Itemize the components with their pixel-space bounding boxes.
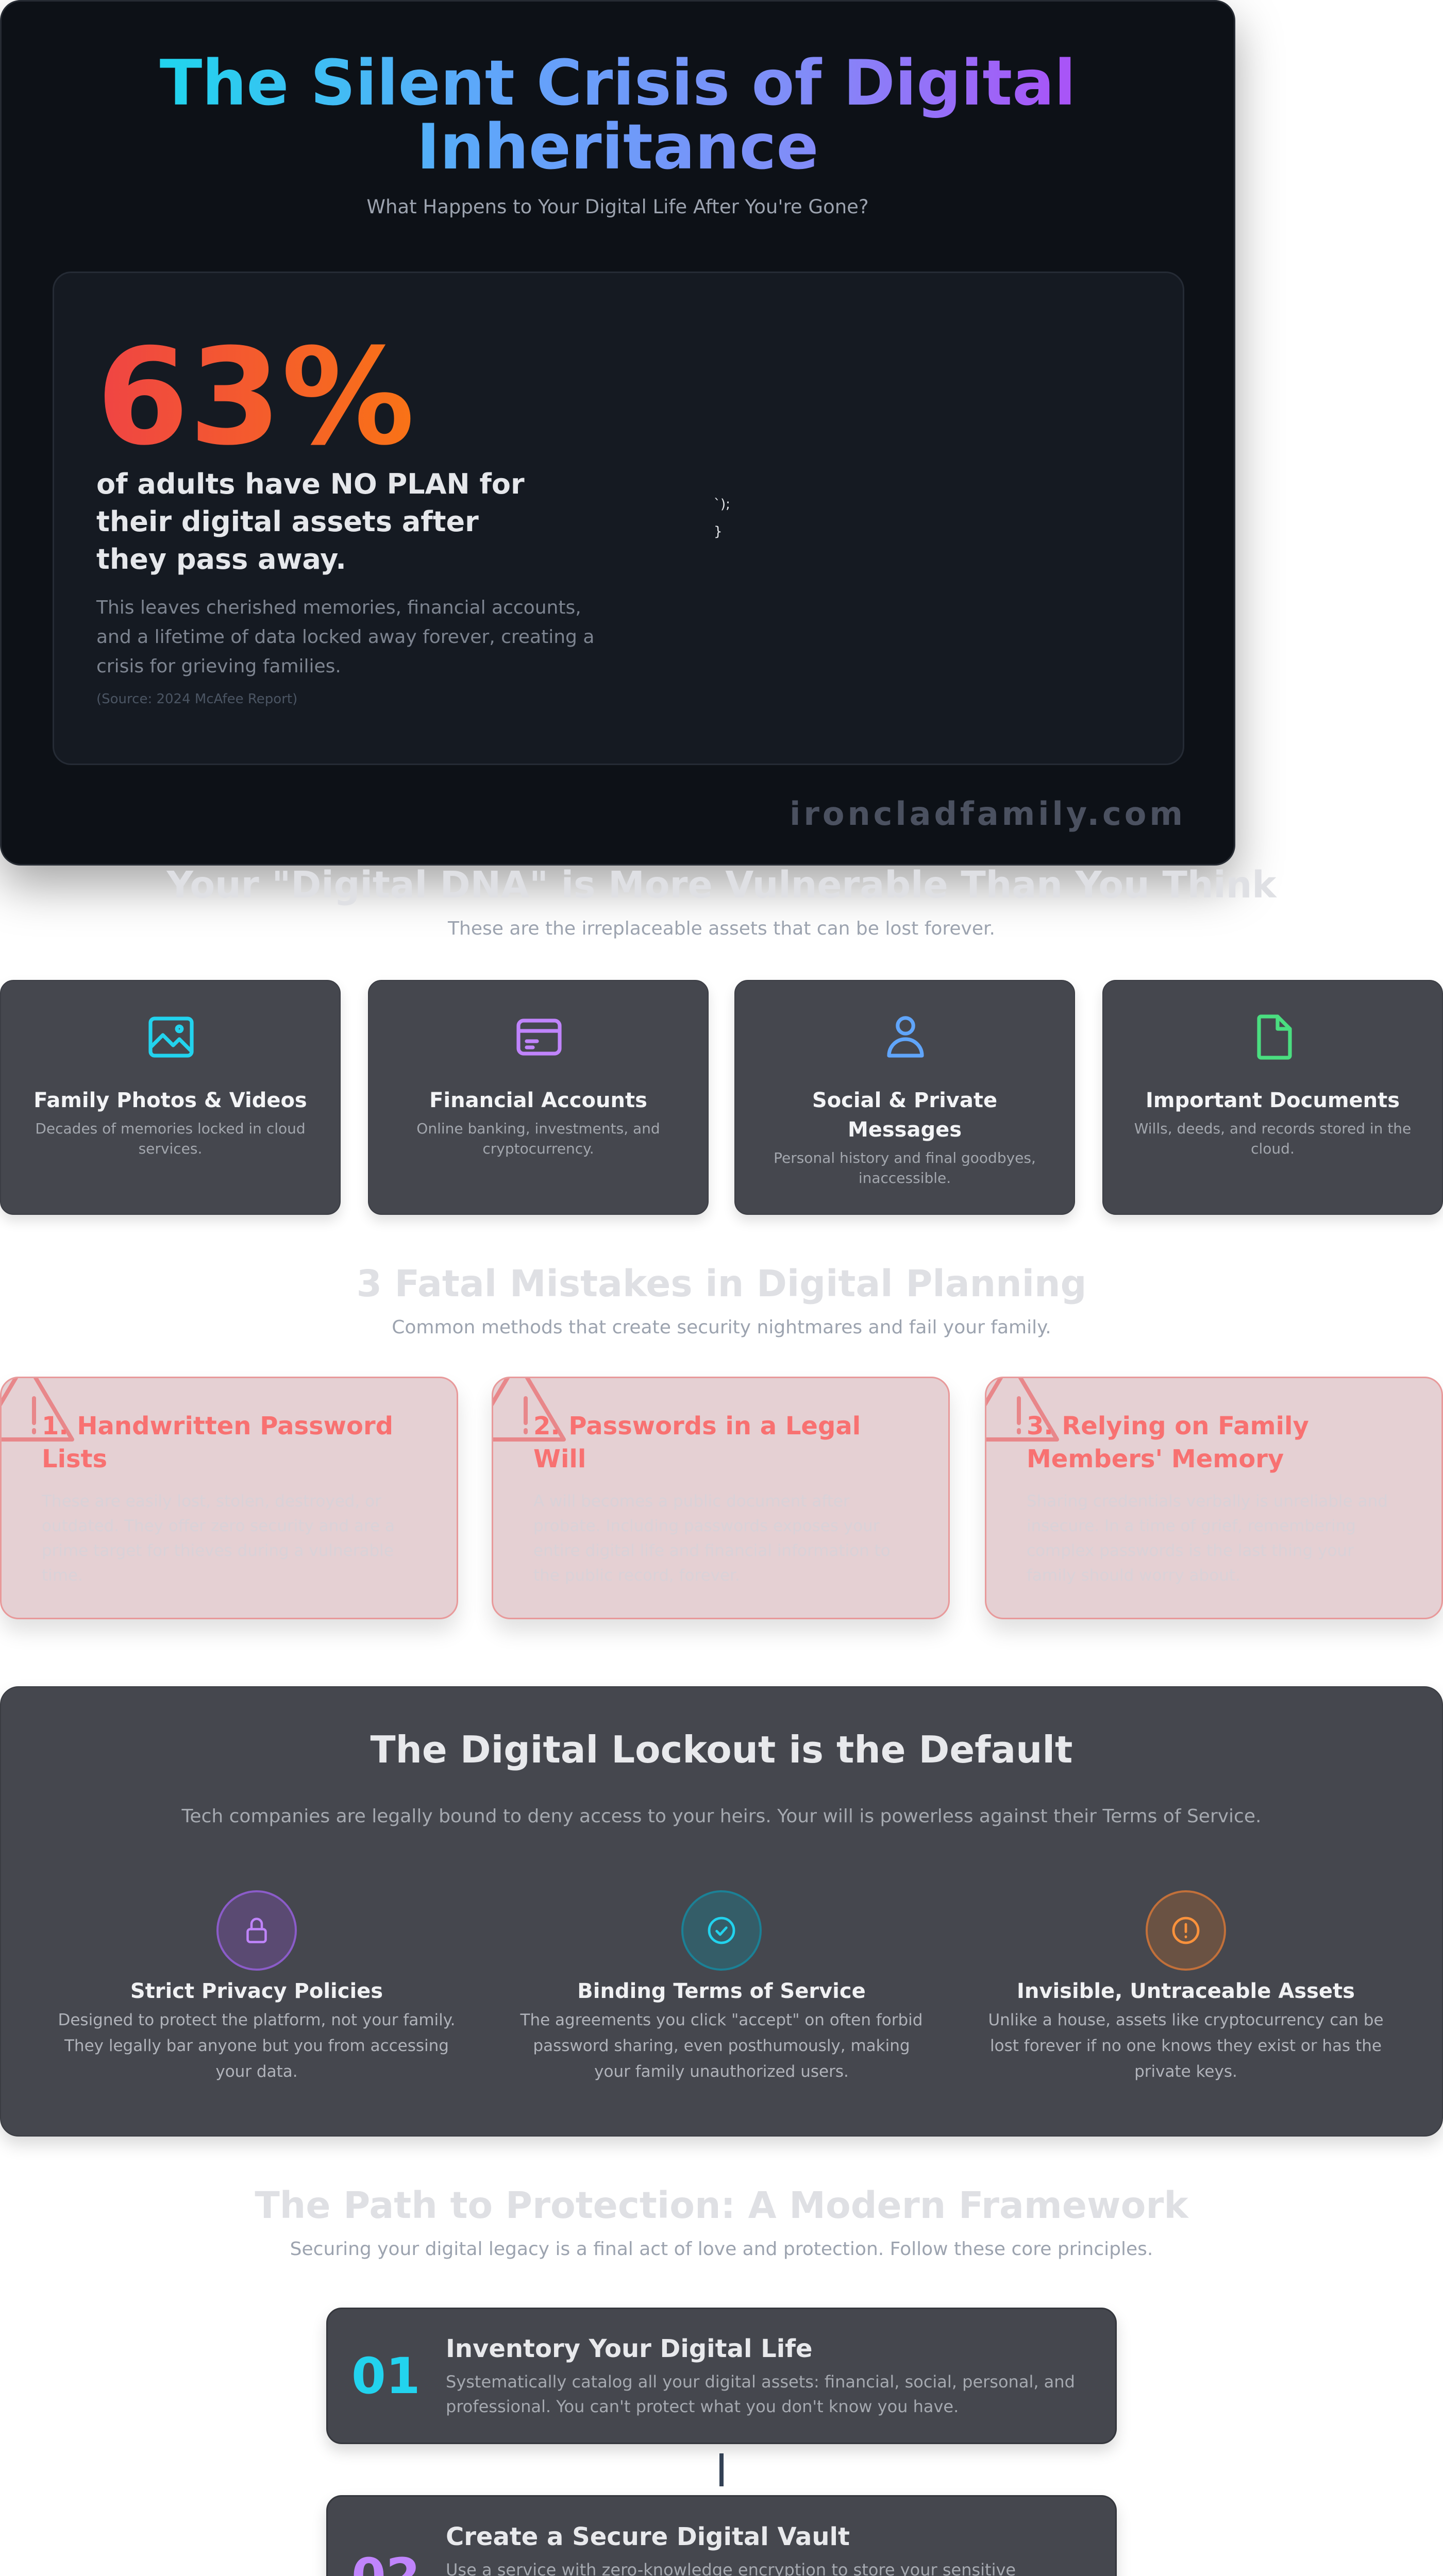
icon: check xyxy=(681,1890,762,1971)
card: mistake 3: insecure. In a time of grief, remembering xyxy=(1027,1517,1356,1535)
card: financial: Financial Accounts xyxy=(429,1089,647,1112)
heading: mistakes: 3 Fatal Mistakes in Digital Planning xyxy=(357,1262,1086,1305)
source: (Source: 2024 McAfee Report) xyxy=(96,691,297,707)
icon: document xyxy=(1257,1014,1292,1060)
stray code text: } xyxy=(714,524,723,539)
card: mistake 1: Lists xyxy=(42,1445,107,1473)
card: mistake 3: Members' Memory xyxy=(1027,1445,1284,1473)
card: mistake 3: family should worry about. xyxy=(1027,1566,1240,1585)
column: terms of service xyxy=(520,1890,922,2081)
column: privacy policies: They legally bar anyone but you from accessing xyxy=(64,2037,449,2055)
card: mistake 3: Sharing credentials verbally is unreliable and xyxy=(1027,1492,1388,1511)
card: mistake 1: These are easily lost, stolen, destroyed, or xyxy=(42,1492,381,1511)
column: invisible assets: private keys. xyxy=(1134,2062,1237,2081)
domain: ironcladfamily.com xyxy=(790,795,1186,833)
card: mistake 1: outdated. They offer zero security and are a xyxy=(42,1517,395,1535)
card: family photos: services. xyxy=(139,1140,202,1157)
lockout subtitle: Tech companies are legally bound to deny access to your heirs. Your will is powerless against their Terms of Service. xyxy=(182,1806,1261,1827)
card: social: Personal history and final goodbyes, xyxy=(774,1149,1036,1166)
card: financial: cryptocurrency. xyxy=(482,1140,594,1157)
panel: digital lockout xyxy=(0,1686,1443,2137)
icon: user xyxy=(887,1016,924,1058)
card: family photos xyxy=(0,980,341,1215)
heading: digital DNA: Your "Digital DNA" is More Vulnerable Than You Think xyxy=(166,863,1277,906)
column: terms of service: password sharing, even posthumously, making xyxy=(533,2037,910,2055)
card: documents: cloud. xyxy=(1251,1140,1295,1157)
stray code text xyxy=(714,497,730,539)
card: mistake 2: probate. Including passwords exposes your xyxy=(533,1517,880,1535)
step 01: Inventory Your Digital Life xyxy=(446,2334,813,2363)
subheading: mistakes: Common methods that create security nightmares and fail your family. xyxy=(392,1317,1051,1338)
icon: image xyxy=(148,1016,194,1058)
card: mistake 1: 1. Handwritten Password xyxy=(42,1412,393,1440)
title xyxy=(2,52,1234,179)
stat description: This leaves cherished memories, financial accounts, xyxy=(96,597,581,618)
card: social: Messages xyxy=(848,1118,962,1142)
heading: path to protection: The Path to Protection: A Modern Framework xyxy=(255,2184,1188,2227)
icon: warning xyxy=(493,1378,566,1442)
card: documents xyxy=(1102,980,1443,1215)
stat statement: of adults have NO PLAN for xyxy=(96,468,525,500)
stat statement xyxy=(96,468,525,575)
big stat 63%: 63% xyxy=(96,320,415,474)
card: financial: Online banking, investments, and xyxy=(416,1120,660,1137)
card: documents: Important Documents xyxy=(1146,1089,1400,1112)
icon: lock xyxy=(216,1890,297,1971)
lockout heading: The Digital Lockout is the Default xyxy=(371,1728,1072,1771)
card: mistake 3: 3. Relying on Family xyxy=(1027,1412,1309,1440)
stray code text: `); xyxy=(714,497,730,512)
column: privacy policies: your data. xyxy=(215,2062,298,2081)
column: privacy policies xyxy=(58,1890,456,2081)
column: terms of service: Binding Terms of Service xyxy=(577,1979,866,2003)
stat description: and a lifetime of data locked away forever, creating a xyxy=(96,626,594,648)
card: family photos: Family Photos & Videos xyxy=(33,1089,307,1112)
stat statement: their digital assets after xyxy=(96,505,479,538)
stat statement: they pass away. xyxy=(96,543,346,575)
card: mistake 3 xyxy=(985,1377,1443,1619)
card: mistake 2: Will xyxy=(533,1445,586,1473)
stat description xyxy=(96,597,594,677)
column: terms of service: The agreements you click "accept" on often forbid xyxy=(521,2011,922,2029)
step 01: Systematically catalog all your digital assets: financial, social, personal, and xyxy=(446,2372,1075,2392)
card: mistake 1: time. xyxy=(42,1566,83,1585)
hero panel xyxy=(0,0,1235,866)
card: mistake 2: 2. Passwords in a Legal xyxy=(533,1412,861,1440)
icon: warning xyxy=(2,1378,74,1442)
connector 1 xyxy=(719,2453,724,2486)
stat panel xyxy=(53,272,1184,765)
card: mistake 2 xyxy=(492,1377,950,1619)
title: Inheritance xyxy=(417,111,818,183)
card: family photos: Decades of memories locked in cloud xyxy=(35,1120,306,1137)
card: documents: Wills, deeds, and records stored in the xyxy=(1134,1120,1411,1137)
column: invisible assets: Invisible, Untraceable Assets xyxy=(1017,1979,1355,2003)
title: The Silent Crisis of Digital xyxy=(160,47,1076,120)
card: mistake 2: A will becomes a public document after xyxy=(533,1492,850,1511)
column: privacy policies: Strict Privacy Policies xyxy=(130,1979,383,2003)
step 01: 01 xyxy=(351,2347,421,2405)
subheading: digital DNA: These are the irreplaceable assets that can be lost forever. xyxy=(448,918,995,939)
card: mistake 2: the public record, forever. xyxy=(533,1566,740,1585)
icon: alert xyxy=(1146,1890,1226,1971)
column: terms of service: your family unauthorized users. xyxy=(594,2062,849,2081)
stat description: crisis for grieving families. xyxy=(96,656,341,677)
column: invisible assets: lost forever if no one knows they exist or has the xyxy=(990,2037,1382,2055)
card: mistake 2: entire digital life and financial information to xyxy=(533,1541,891,1560)
step 02 xyxy=(326,2495,1117,2576)
card: mistake 1 xyxy=(0,1377,458,1619)
icon: warning xyxy=(986,1378,1059,1442)
card: financial xyxy=(368,980,709,1215)
column: privacy policies: Designed to protect the platform, not your family. xyxy=(58,2011,456,2029)
card: mistake 3: complex passwords is the last thing your xyxy=(1027,1541,1354,1560)
subheading: path to protection: Securing your digital legacy is a final act of love and protection. Follow these core principles. xyxy=(290,2239,1153,2260)
card: social: Social & Private xyxy=(812,1089,997,1112)
icon: card xyxy=(516,1019,562,1056)
step 01: professional. You can't protect what you don't know you have. xyxy=(446,2397,959,2416)
subtitle: What Happens to Your Digital Life After You're Gone? xyxy=(366,196,869,218)
card: social xyxy=(734,980,1075,1215)
card: social: inaccessible. xyxy=(859,1170,951,1187)
column: invisible assets: Unlike a house, assets like cryptocurrency can be xyxy=(988,2011,1384,2029)
column: invisible assets xyxy=(988,1890,1384,2081)
step 02: Create a Secure Digital Vault xyxy=(446,2522,850,2551)
card: mistake 1: prime target for thieves during a vulnerable xyxy=(42,1541,394,1560)
step 01 xyxy=(326,2308,1117,2444)
